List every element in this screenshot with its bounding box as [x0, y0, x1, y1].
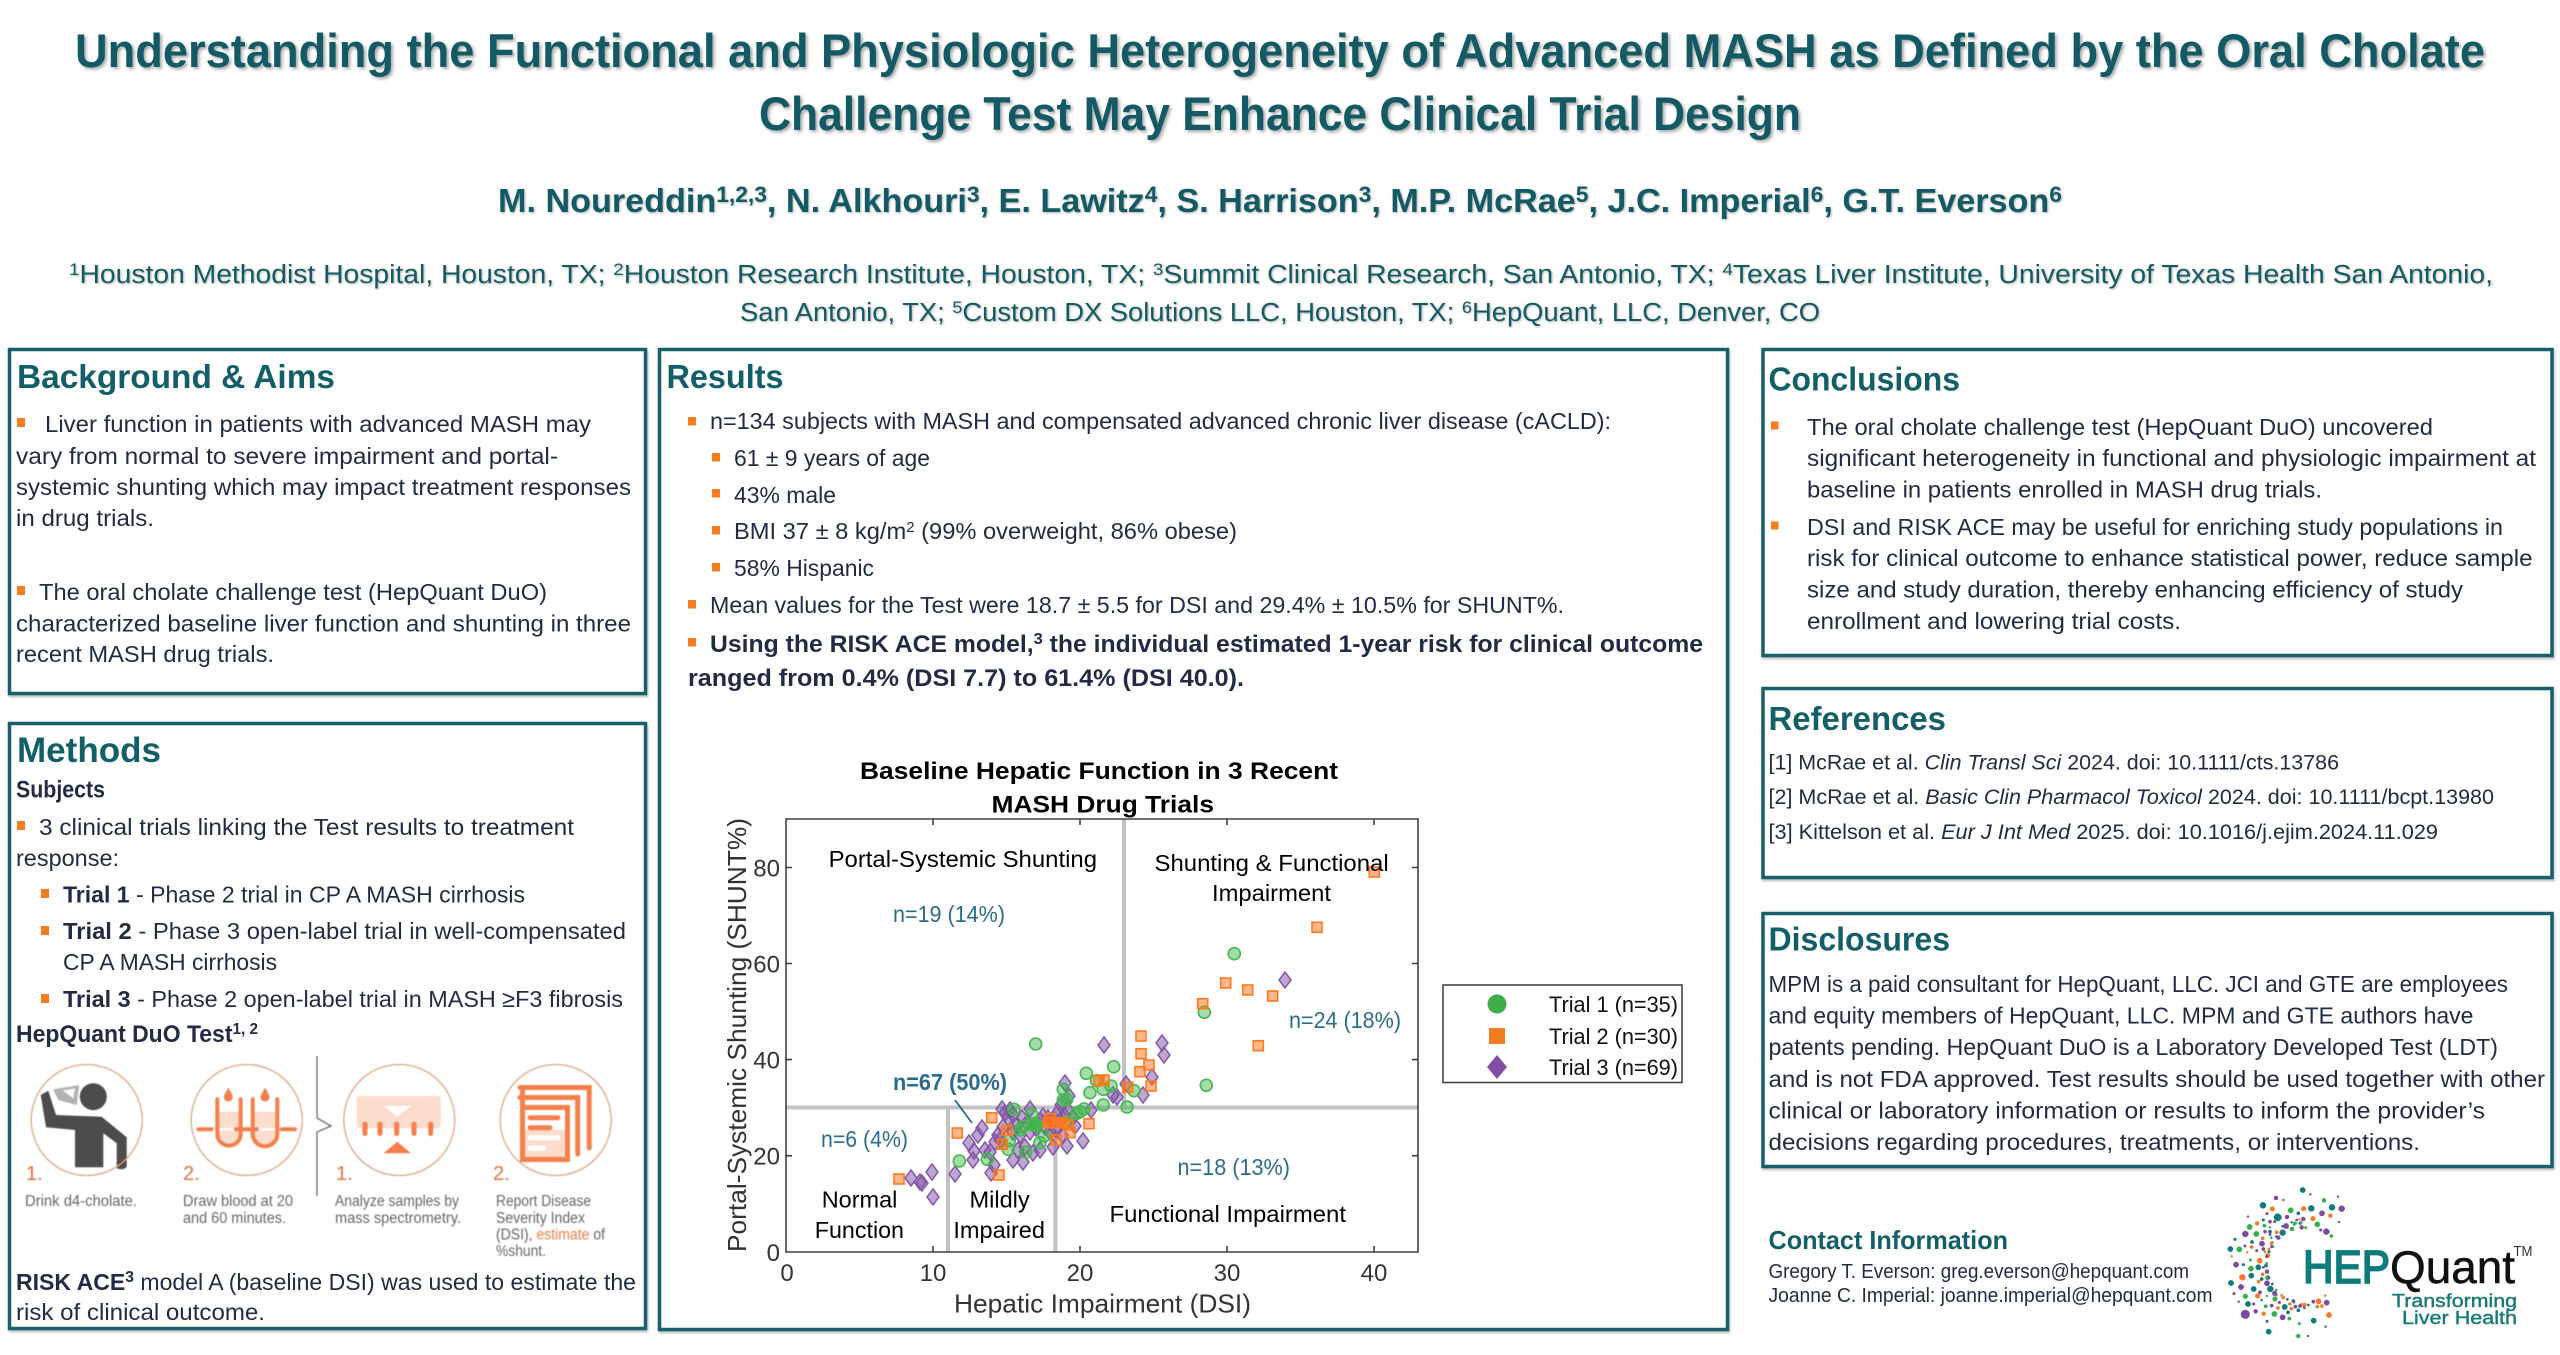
authors: , S. Harrison [1157, 182, 1359, 219]
authors: M. Noureddin [498, 182, 709, 219]
affiliations: 2 [613, 260, 624, 279]
step labels [25, 1163, 606, 1260]
logo: HepQuant [2228, 1187, 2532, 1338]
step labels: and 60 minutes. [183, 1210, 286, 1227]
heading: conclusions: Conclusions [1768, 360, 1960, 398]
panel: methods [10, 724, 646, 1328]
quadrant labels: Shunting & Functional [1154, 850, 1389, 876]
quadrant labels: Functional Impairment [1110, 1201, 1346, 1227]
y axis tick labels: 0 [767, 1240, 780, 1267]
affiliations [69, 260, 2493, 327]
text block: reference list: [3] Kittelson et al. Eur J Int Med 2025. doi: 10.1016/j.ejim.2024.11.029 [1768, 820, 2438, 844]
icon: drink cholate [31, 1064, 142, 1176]
text block: results bullets: 3 [1034, 631, 1043, 648]
logo wordmark: Liver Health [2402, 1307, 2517, 1328]
x axis tick labels [780, 1260, 1387, 1287]
text block: subjects [16, 776, 626, 1012]
text block: results bullets: 58% Hispanic [734, 555, 874, 581]
text block: RISK ACE: risk of clinical outcome. [16, 1299, 265, 1325]
x axis tick labels: 30 [1214, 1260, 1240, 1287]
heading: background and aims: Background & Aims [17, 358, 335, 395]
x axis tick labels: 0 [780, 1260, 794, 1287]
text block: RISK ACE: RISK ACE [16, 1269, 125, 1295]
authors [498, 182, 2062, 219]
affiliations: Houston Methodist Hospital, Houston, TX; [79, 261, 613, 289]
text block: reference list: [1] McRae et al. Clin Transl Sci 2024. doi: 10.1111/cts.13786 [1768, 750, 2339, 774]
text block: subjects: response: [16, 845, 119, 871]
legend: Trial 1 (n=35) [1549, 992, 1678, 1017]
text block: subjects: 3 clinical trials linking the Test results to treatment [39, 814, 574, 840]
step labels: Severity Index [496, 1210, 585, 1227]
logo wordmark: TM [2514, 1243, 2532, 1260]
affiliations: San Antonio, TX; [740, 299, 931, 327]
authors: 6 [2049, 182, 2062, 207]
logo dots [2228, 1187, 2345, 1338]
text block: results bullets [688, 408, 1703, 692]
contact information: Joanne C. Imperial: joanne.imperial@hepquant.com [1768, 1284, 2212, 1307]
icon: report document [500, 1064, 611, 1176]
step labels: 2. [493, 1163, 510, 1185]
heading: references: References [1768, 700, 1946, 737]
text block: results bullets: 43% male [734, 482, 836, 508]
text block: RISK ACE: model A (baseline DSI) was used to estimate the [134, 1269, 636, 1295]
chart title: Baseline Hepatic Function in 3 Recent [860, 758, 1338, 785]
text block: RISK ACE [16, 1269, 636, 1325]
legend: Trial 2 (n=30) [1549, 1024, 1678, 1049]
text block: disclosures: patents pending. HepQuant DuO is a Laboratory Developed Test (LDT) [1768, 1034, 2498, 1060]
step labels: Drink d4-cholate. [25, 1193, 137, 1210]
x axis tick labels: 20 [1067, 1260, 1093, 1287]
heading: methods: Methods [17, 731, 161, 770]
icon: draw blood [191, 1064, 302, 1176]
plot axes and ticks [786, 819, 1418, 1252]
y axis tick labels: 40 [753, 1048, 780, 1074]
legend: Trial 3 (n=69) [1549, 1055, 1678, 1080]
title: Understanding the Functional and Physiologic Heterogeneity of Advanced MASH as Defined by the Oral Cholate [75, 24, 2485, 77]
authors: 3 [1359, 182, 1371, 207]
affiliations: Houston Research Institute, Houston, TX; [624, 261, 1153, 289]
step labels: mass spectrometry. [335, 1210, 461, 1227]
authors: , M.P. McRae [1371, 182, 1576, 219]
quadrant counts: n=18 (13%) [1178, 1154, 1290, 1180]
text block: results bullets: 2 [906, 519, 915, 536]
step labels: (DSI), estimate of [496, 1226, 606, 1244]
text block: results bullets: 61 ± 9 years of age [734, 445, 930, 471]
quadrant labels: Portal-Systemic Shunting [829, 846, 1097, 872]
authors: , J.C. Imperial [1588, 182, 1811, 219]
series: trial 3 diamonds [905, 972, 1291, 1205]
quadrant labels: Function [815, 1217, 904, 1243]
text block: reference list: [2] McRae et al. Basic Clin Pharmacol Toxicol 2024. doi: 10.1111/bcpt.13980 [1768, 785, 2494, 809]
text block: results bullets: (99% overweight, 86% obese) [915, 518, 1237, 544]
x axis tick labels: 10 [920, 1260, 946, 1287]
text block: conclusions bullets: size and study duration, thereby enhancing efficiency of study [1807, 576, 2463, 602]
text block: disclosures: and equity members of HepQuant, LLC. MPM and GTE authors have [1768, 1002, 2474, 1028]
infographic: test procedure steps [25, 1056, 611, 1260]
panel: disclosures [1763, 914, 2552, 1166]
text block: background bullets: Liver function in patients with advanced MASH may [45, 411, 591, 437]
icon: divider chevron [317, 1056, 331, 1196]
text block: results bullets: n=134 subjects with MASH and compensated advanced chronic liver disease (cACLD): [710, 408, 1611, 434]
step labels: 1. [336, 1163, 353, 1185]
affiliations: 5 [952, 298, 962, 317]
step labels: 1. [26, 1163, 43, 1185]
text block: disclosures: MPM is a paid consultant for HepQuant, LLC. JCI and GTE are employees [1768, 971, 2508, 997]
quadrant counts: n=19 (14%) [893, 901, 1005, 927]
series: trial 2 squares [894, 867, 1379, 1184]
text block: results bullets: Using the RISK ACE model, [710, 631, 1024, 658]
heading: disclosures: Disclosures [1768, 920, 1950, 958]
authors: 4 [1145, 182, 1158, 207]
text block: conclusions bullets: risk for clinical outcome to enhance statistical power, reduce sample [1807, 545, 2532, 571]
quadrant counts: n=6 (4%) [821, 1126, 908, 1152]
text block: background bullets: recent MASH drug trials. [16, 641, 274, 667]
text block: reference list [1768, 750, 2494, 844]
authors: , E. Lawitz [980, 182, 1145, 219]
text block: background bullets: vary from normal to severe impairment and portal- [16, 443, 558, 469]
text block: subjects: Trial 3 - Phase 2 open-label trial in MASH ≥F3 fibrosis [63, 986, 623, 1012]
title: Challenge Test May Enhance Clinical Trial Design [759, 87, 1801, 140]
affiliations: Texas Liver Institute, University of Texas Health San Antonio, [1733, 261, 2493, 289]
subheading: HepQuant DuO Test: 1, 2 [232, 1021, 258, 1038]
text block: conclusions bullets: significant heterogeneity in functional and physiologic impairment at [1807, 445, 2536, 471]
authors: , G.T. Everson [1823, 182, 2049, 219]
quadrant counts: n=67 (50%) [893, 1069, 1007, 1095]
quadrant labels: Normal [822, 1186, 897, 1212]
authors: , N. Alkhouri [767, 182, 967, 219]
text block: conclusions bullets: baseline in patients enrolled in MASH drug trials. [1807, 476, 2322, 502]
affiliations: 1 [69, 260, 79, 279]
text block: disclosures: and is not FDA approved. Test results should be used together with other [1768, 1066, 2545, 1092]
quadrant labels [815, 846, 1389, 1243]
affiliations: 4 [1722, 260, 1733, 279]
authors: 1,2,3 [716, 182, 767, 207]
contact information [1768, 1225, 2212, 1307]
contact information: Contact Information [1768, 1225, 2008, 1255]
quadrant counts [821, 901, 1401, 1180]
affiliations: HepQuant, LLC, Denver, CO [1472, 299, 1820, 327]
text block: background bullets: in drug trials. [16, 505, 154, 531]
step labels: Report Disease [496, 1193, 591, 1210]
leader line [955, 1100, 972, 1123]
text block: background bullets: The oral cholate challenge test (HepQuant DuO) [39, 579, 547, 605]
heading: results: Results [666, 358, 784, 395]
step labels: 2. [183, 1163, 200, 1185]
chart title [860, 758, 1338, 818]
panel: results [660, 350, 1728, 1330]
icon: mass spectrometry [344, 1064, 455, 1176]
quadrant labels: Impairment [1212, 880, 1331, 906]
panel: references [1763, 688, 2552, 878]
text block: background bullets: characterized baseline liver function and shunting in three [16, 610, 631, 636]
logo wordmark [2303, 1241, 2532, 1328]
affiliations: 3 [1153, 260, 1163, 279]
text block: conclusions bullets: DSI and RISK ACE may be useful for enriching study populations in [1807, 514, 2503, 540]
logo wordmark: HEP [2303, 1241, 2390, 1293]
y axis tick labels: 60 [753, 952, 780, 978]
authors: 5 [1576, 182, 1588, 207]
logo wordmark: Transforming [2392, 1290, 2517, 1311]
text block: conclusions bullets: The oral cholate challenge test (HepQuant DuO) uncovered [1807, 414, 2433, 440]
quadrant counts: n=24 (18%) [1289, 1007, 1401, 1033]
quadrant labels: Impaired [953, 1217, 1045, 1243]
authors: 6 [1811, 182, 1823, 207]
chart title: MASH Drug Trials [992, 792, 1214, 818]
text block: subjects: Trial 1 - Phase 2 trial in CP A MASH cirrhosis [63, 882, 525, 908]
panel: background and aims [10, 350, 646, 694]
y axis tick labels: 80 [753, 856, 780, 882]
affiliations: 6 [1462, 298, 1472, 317]
text block: results bullets: BMI 37 ± 8 kg/m [734, 518, 905, 544]
contact information: Gregory T. Everson: greg.everson@hepquant.com [1768, 1260, 2189, 1283]
step labels: Analyze samples by [335, 1193, 459, 1210]
scatter chart: baseline hepatic function [722, 758, 1682, 1318]
text block: subjects: CP A MASH cirrhosis [63, 949, 277, 975]
quadrant labels: Mildly [970, 1186, 1030, 1212]
text block: disclosures: clinical or laboratory information or results to inform the provider’s [1768, 1098, 2485, 1124]
text block: background bullets [16, 411, 631, 667]
series: trial 1 circles [953, 948, 1240, 1167]
x axis tick labels: 40 [1361, 1260, 1387, 1287]
text block: disclosures: decisions regarding procedures, treatments, or interventions. [1768, 1129, 2420, 1155]
affiliations: Summit Clinical Research, San Antonio, TX; [1163, 261, 1722, 289]
subheading: HepQuant DuO Test: HepQuant DuO Test [16, 1021, 242, 1048]
text block: background bullets: systemic shunting which may impact treatment responses [16, 474, 631, 500]
text block: results bullets: the individual estimated 1-year risk for clinical outcome [1043, 631, 1703, 658]
threshold lines [786, 819, 1418, 1252]
step labels: Draw blood at 20 [183, 1193, 293, 1210]
text block: results bullets: Mean values for the Test were 18.7 ± 5.5 for DSI and 29.4% ± 10.5% for SHUNT%. [710, 592, 1564, 618]
title [75, 24, 2485, 140]
text block: subjects: Subjects [16, 776, 105, 804]
y axis tick labels [753, 856, 780, 1267]
text block: results bullets: ranged from 0.4% (DSI 7.7) to 61.4% (DSI 40.0). [688, 665, 1244, 692]
y axis label: Portal-Systemic Shunting (SHUNT%) [722, 818, 752, 1252]
text block: conclusions bullets: enrollment and lowering trial costs. [1807, 608, 2181, 634]
text block: RISK ACE: 3 [125, 1269, 134, 1286]
authors: 3 [967, 182, 980, 207]
legend [1443, 985, 1682, 1082]
y axis tick labels: 20 [753, 1144, 780, 1170]
text block: conclusions bullets [1771, 414, 2536, 634]
text block: subjects: Trial 2 - Phase 3 open-label trial in well-compensated [63, 918, 626, 944]
logo wordmark: Quant [2390, 1241, 2515, 1293]
text block: disclosures [1768, 971, 2545, 1155]
affiliations: Custom DX Solutions LLC, Houston, TX; [962, 299, 1462, 327]
panel: conclusions [1763, 350, 2552, 656]
step labels: %shunt. [496, 1243, 546, 1260]
x axis label: Hepatic Impairment (DSI) [954, 1288, 1251, 1318]
